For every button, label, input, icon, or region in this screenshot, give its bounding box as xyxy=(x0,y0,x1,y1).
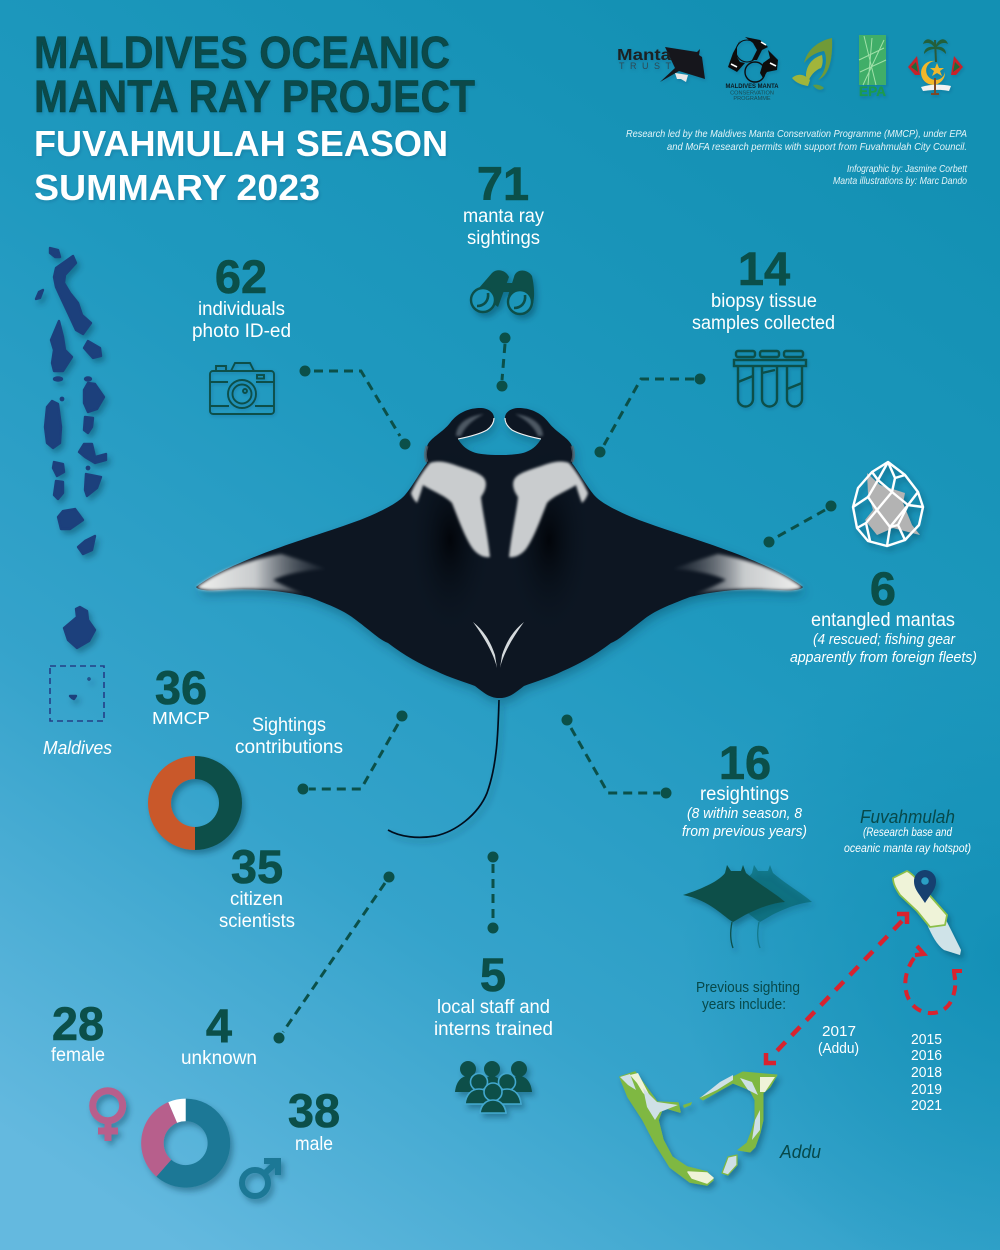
connector: camera xyxy=(300,366,410,450)
heading: Fuvahmulah: (Research base and xyxy=(863,827,953,839)
manta body lobes xyxy=(408,445,492,635)
stat: individuals photo ID-ed: photo ID-ed xyxy=(192,321,291,342)
credits: and MoFA research permits with support from Fuvahmulah City Council. xyxy=(667,141,967,153)
connector: resightings xyxy=(562,714,672,798)
manta belly chevrons xyxy=(473,622,524,668)
stat: biopsy samples: samples collected xyxy=(692,313,835,334)
logo: coat of arms xyxy=(908,39,963,94)
credits: Infographic by: Jasmine Corbett xyxy=(847,163,968,175)
map inset box xyxy=(50,666,104,721)
title: MALDIVES OCEANIC xyxy=(34,27,450,78)
stat: resightings: 16 xyxy=(719,736,771,789)
logo: MMCP: MALDIVES MANTA xyxy=(726,83,779,90)
stat: entangled mantas: 6 xyxy=(870,562,896,615)
stat: manta ray sightings: sightings xyxy=(467,228,540,249)
heading: sightings contributions xyxy=(235,715,343,758)
logo: Manta Trust: TRUST xyxy=(619,61,672,71)
stat: female: female xyxy=(51,1045,105,1066)
manta shoulder patches xyxy=(411,462,588,557)
arrow: Addu to Fuvahmulah xyxy=(766,914,907,1063)
title: FUVAHMULAH SEASON xyxy=(34,123,448,164)
stat: local staff trained: interns trained xyxy=(434,1019,553,1040)
stat: citizen scientists: 35 xyxy=(231,840,283,893)
text: Fuvahmulah sighting years: 2016 xyxy=(911,1048,942,1064)
title xyxy=(34,27,475,208)
heading: sightings contributions: Sightings xyxy=(252,715,326,736)
stat: MMCP sightings: MMCP xyxy=(152,708,210,728)
stat: individuals photo ID-ed: 62 xyxy=(215,250,267,303)
icon: male symbol xyxy=(242,1161,278,1196)
stat: male: male xyxy=(295,1134,333,1155)
icon: binoculars xyxy=(471,270,534,314)
map: Addu atoll xyxy=(620,1072,777,1185)
text: Fuvahmulah sighting years: 2019 xyxy=(911,1082,942,1098)
logo: Manta Trust xyxy=(617,47,705,82)
stat: resightings: resightings xyxy=(700,784,789,805)
heading: Fuvahmulah xyxy=(844,807,971,855)
map label: Maldives xyxy=(43,738,112,758)
stat: entangled mantas xyxy=(790,562,977,666)
heading: sightings contributions: contributions xyxy=(235,737,343,758)
credits xyxy=(626,128,968,187)
connector: sex ratio xyxy=(274,872,394,1044)
logo: MMCP: CONSERVATION xyxy=(730,90,774,96)
text: Fuvahmulah sighting years: 2015 xyxy=(911,1032,942,1048)
connector: test tubes xyxy=(594,374,706,458)
text: 2017 Addu: 2017 xyxy=(822,1024,856,1040)
manta ray xyxy=(196,408,803,837)
connector: sightings contributions xyxy=(298,710,408,794)
icon: camera xyxy=(210,363,274,414)
stat: entangled mantas: entangled mantas xyxy=(811,610,955,631)
stat: manta ray sightings: 71 xyxy=(477,157,529,210)
map: Maldives atolls xyxy=(36,248,106,699)
stat: citizen scientists: citizen xyxy=(230,889,283,910)
map label: Addu: Addu xyxy=(779,1142,821,1162)
stat: individuals photo ID-ed xyxy=(192,250,291,342)
stat: female: 28 xyxy=(52,997,104,1050)
text: Fuvahmulah sighting years: 2018 xyxy=(911,1065,942,1081)
text: 2017 Addu xyxy=(818,1024,859,1057)
title: SUMMARY 2023 xyxy=(34,167,320,208)
text: previous sighting years: years include: xyxy=(702,997,786,1013)
connector: staff xyxy=(488,852,498,934)
text: previous sighting years: Previous sighting xyxy=(696,980,800,996)
stat: MMCP sightings: 36 xyxy=(155,661,207,714)
manta head sheen xyxy=(426,414,574,462)
heading: Fuvahmulah: oceanic manta ray hotspot) xyxy=(844,843,971,855)
donut chart: sex ratio xyxy=(141,1099,230,1188)
stat: resightings: from previous years) xyxy=(682,823,807,840)
stat: citizen scientists: scientists xyxy=(219,911,295,932)
stat: individuals photo ID-ed: individuals xyxy=(198,299,285,320)
text: 2017 Addu: (Addu) xyxy=(818,1041,859,1057)
donut chart: sightings contributions xyxy=(148,756,242,850)
icon: female symbol xyxy=(93,1091,123,1141)
connector: entanglement xyxy=(764,500,836,548)
connector: binoculars xyxy=(496,332,510,392)
heading: Fuvahmulah: Fuvahmulah xyxy=(860,807,955,827)
stat: unknown: unknown xyxy=(181,1048,257,1069)
title: MANTA RAY PROJECT xyxy=(34,71,475,122)
stat: biopsy samples xyxy=(692,242,835,334)
icon: two manta silhouettes xyxy=(683,865,812,948)
stat: biopsy samples: biopsy tissue xyxy=(711,291,817,312)
credits: Manta illustrations by: Marc Dando xyxy=(833,175,967,187)
logo: EPA: EPA xyxy=(859,84,886,99)
icon: test tubes xyxy=(734,351,806,407)
logo: MMCP xyxy=(726,37,779,102)
logo: leaf xyxy=(792,38,832,90)
stat: local staff trained xyxy=(434,948,553,1040)
stat: unknown xyxy=(181,999,257,1069)
stat: resightings xyxy=(682,736,807,840)
stat: unknown: 4 xyxy=(206,999,232,1052)
stat: local staff trained: local staff and xyxy=(437,997,550,1018)
stat: entangled mantas: (4 rescued; fishing gear xyxy=(813,631,956,648)
stat: male: 38 xyxy=(288,1084,340,1137)
manta wing tips xyxy=(197,554,326,594)
arrow: Fuvahmulah loop xyxy=(905,946,962,1013)
stat: biopsy samples: 14 xyxy=(738,242,790,295)
text: Fuvahmulah sighting years xyxy=(911,1032,942,1114)
icon: map pin xyxy=(914,870,936,903)
stat: citizen scientists xyxy=(219,840,295,932)
stat: local staff trained: 5 xyxy=(480,948,506,1001)
stat: entangled mantas: apparently from foreign fleets) xyxy=(790,649,977,666)
stat: manta ray sightings: manta ray xyxy=(463,206,544,227)
text: Fuvahmulah sighting years: 2021 xyxy=(911,1098,942,1114)
icon: entangled manta in net xyxy=(853,462,923,546)
logo: MMCP: PROGRAMME xyxy=(733,96,771,102)
icon: group of people xyxy=(455,1061,532,1113)
stat: resightings: (8 within season, 8 xyxy=(687,805,803,822)
stat: manta ray sightings xyxy=(463,157,544,249)
map: Fuvahmulah island xyxy=(893,870,961,955)
text: previous sighting years xyxy=(696,980,800,1013)
logo: Manta Trust: Manta xyxy=(617,47,671,64)
logo: EPA xyxy=(859,35,886,99)
